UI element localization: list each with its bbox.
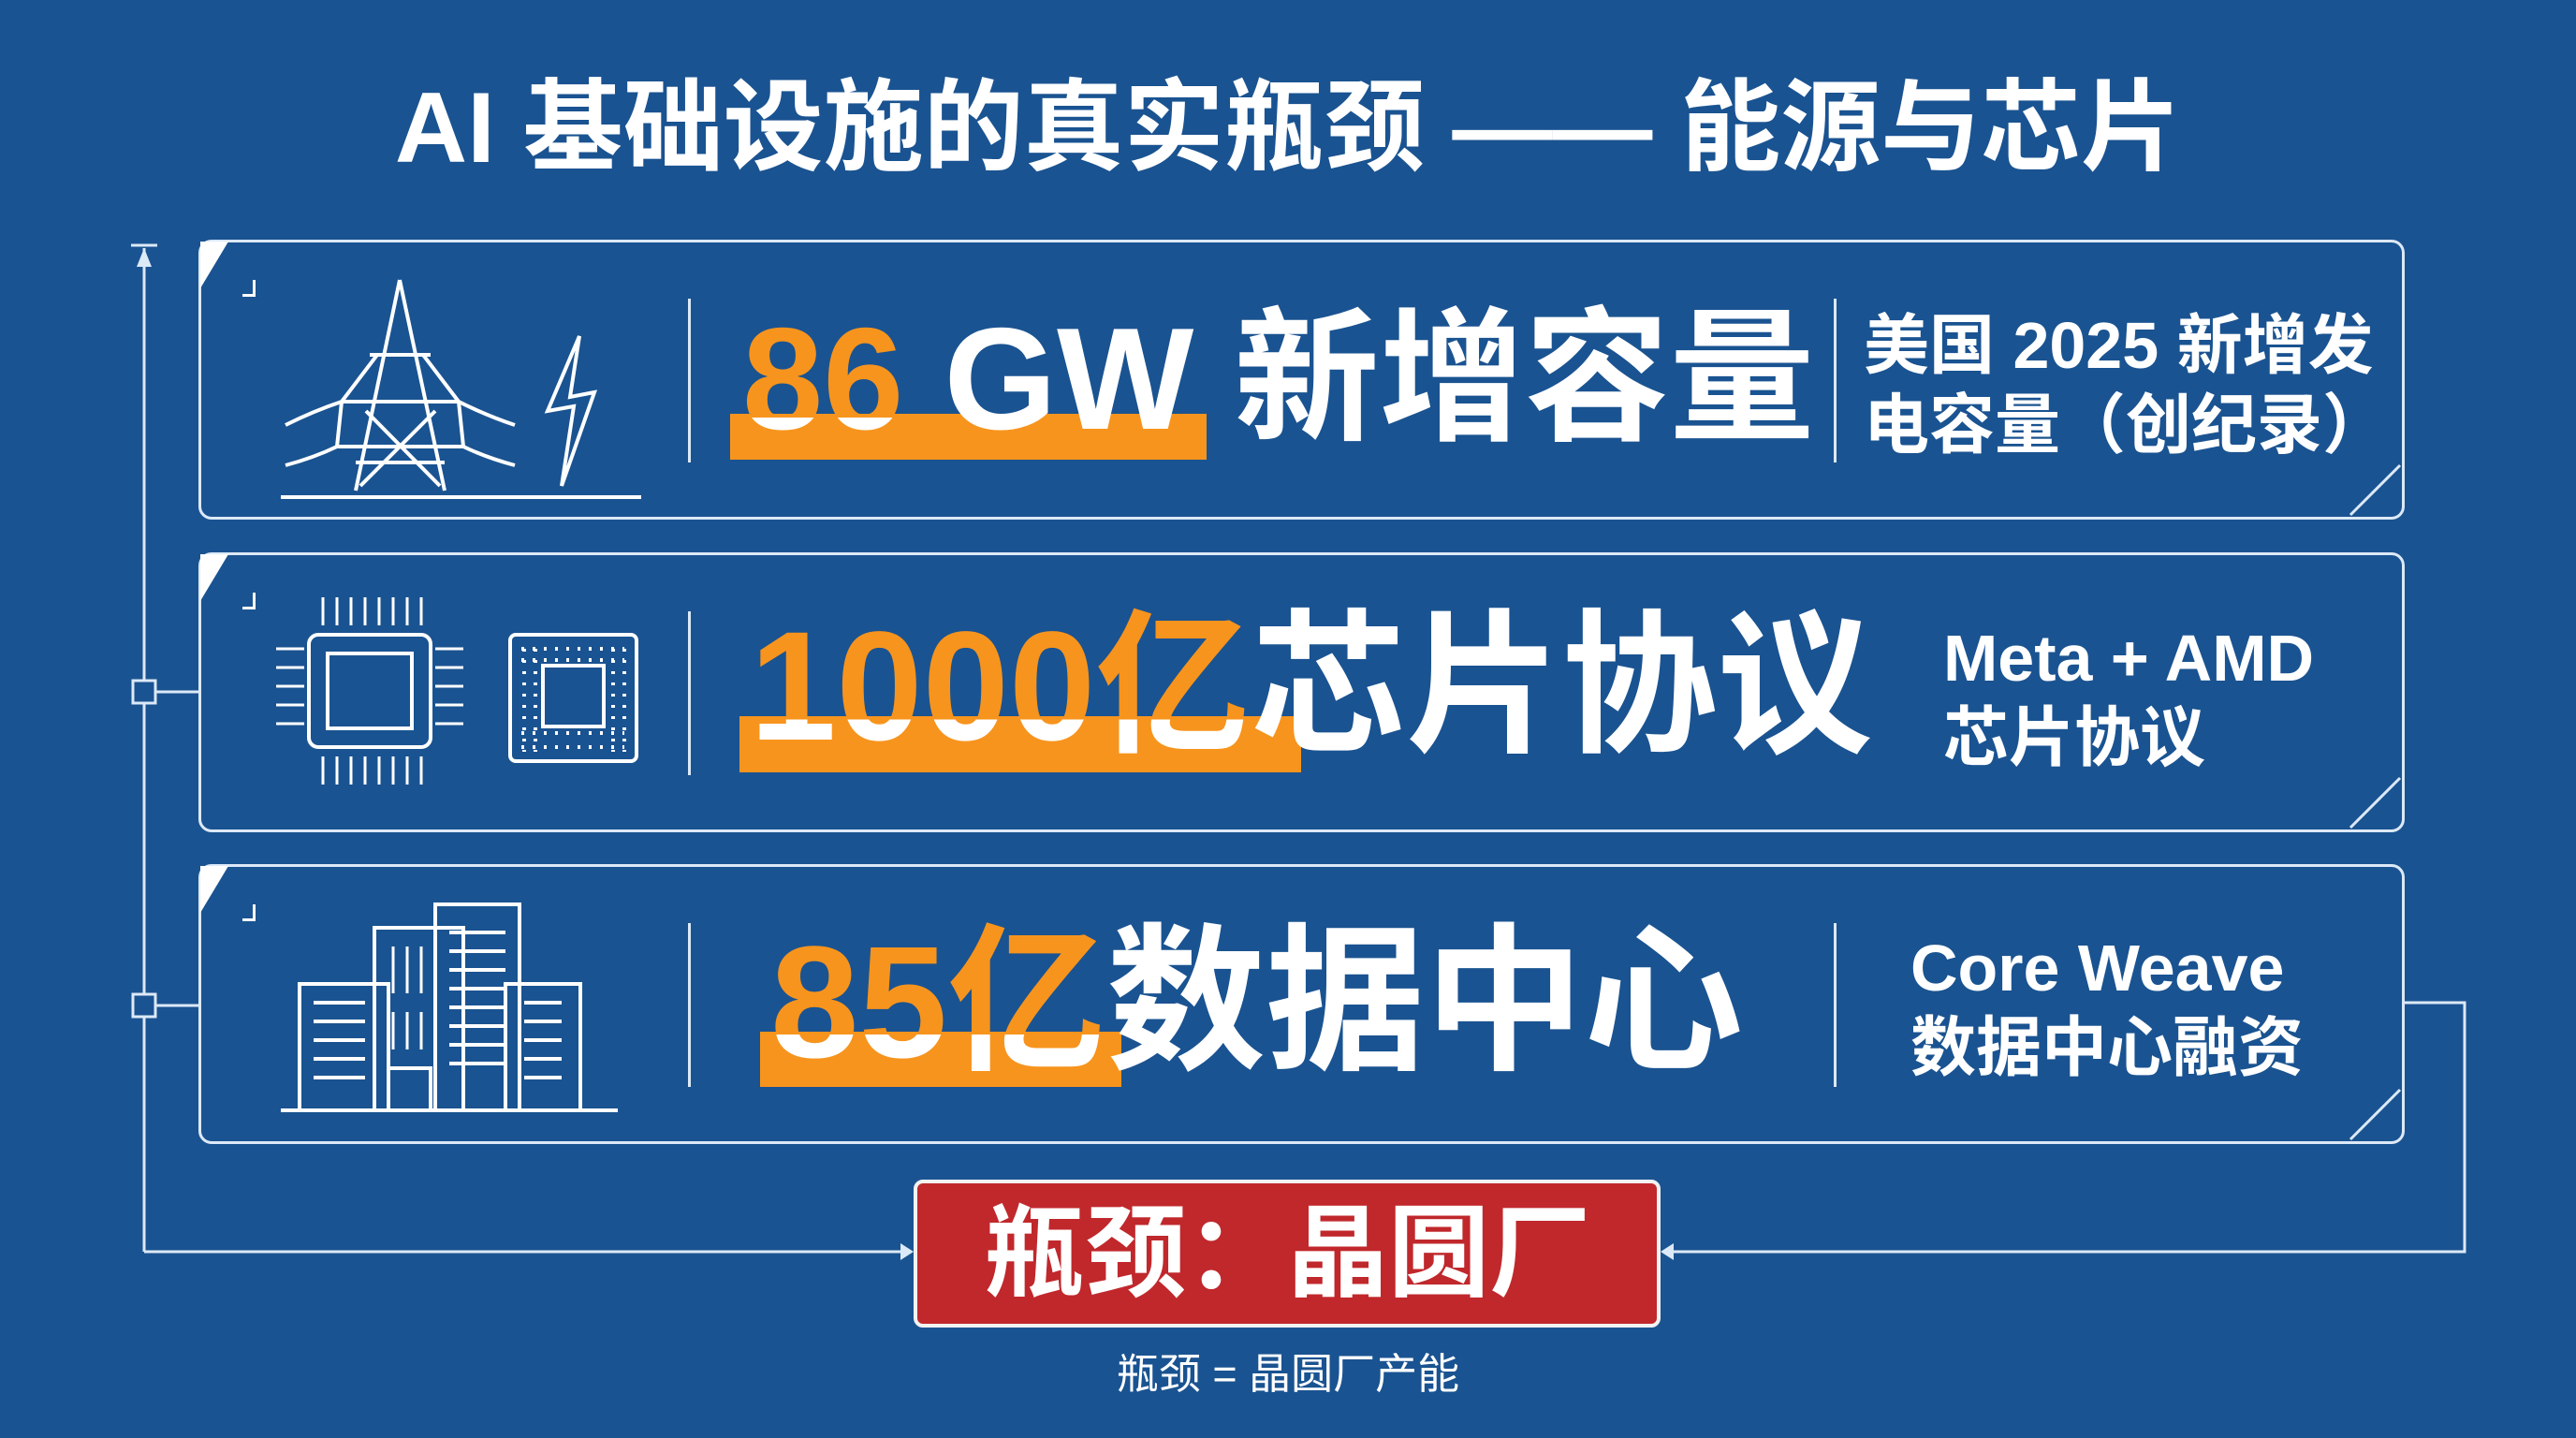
- caption: 瓶颈 = 晶圆厂产能: [1117, 1350, 1459, 1398]
- side text: 数据中心融资: [1910, 1011, 2304, 1084]
- icon: chips: [276, 597, 638, 785]
- highlight: [739, 716, 1301, 772]
- highlight: [730, 414, 1207, 460]
- icon: buildings: [281, 902, 618, 1112]
- big number: 1000亿芯片协议: [750, 600, 1872, 773]
- side text: Core Weave: [1910, 932, 2284, 1005]
- side text: [1943, 622, 2314, 774]
- side text: 美国 2025 新增发: [1864, 309, 2374, 382]
- big number: 85亿数据中心: [770, 914, 1743, 1092]
- callout: bottleneck: 瓶颈：晶圆厂: [984, 1196, 1590, 1310]
- side text: [1864, 309, 2388, 462]
- highlight: [760, 1032, 1121, 1087]
- side text: [1910, 932, 2304, 1084]
- panel: data center: [198, 864, 2405, 1144]
- panel: energy: [198, 240, 2405, 520]
- side text: Meta + AMD: [1943, 622, 2314, 695]
- side text: 芯片协议: [1943, 701, 2205, 774]
- icon: power tower: [281, 279, 641, 499]
- big number: 86 GW 新增容量: [742, 298, 1814, 460]
- callout: bottleneck: [914, 1180, 1661, 1328]
- title: AI 基础设施的真实瓶颈 —— 能源与芯片: [395, 71, 2181, 183]
- side text: 电容量（创纪录）: [1864, 389, 2388, 462]
- panel: chips: [198, 552, 2405, 832]
